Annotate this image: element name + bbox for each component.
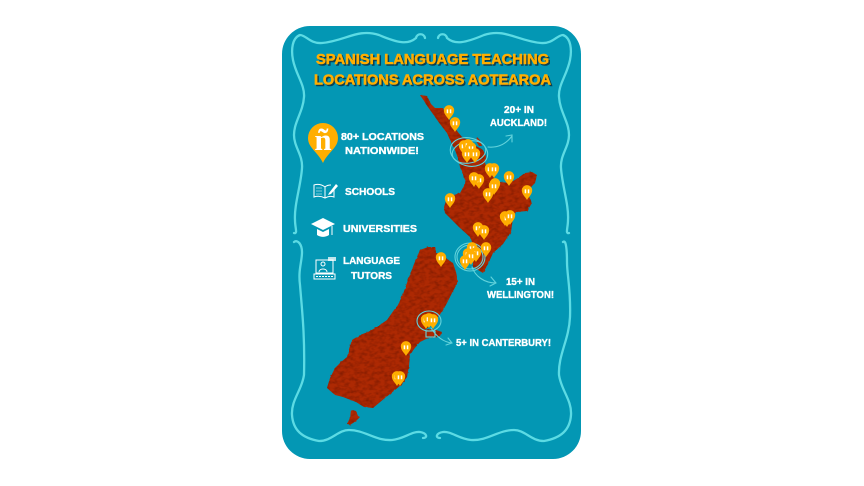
title: LOCATIONS ACROSS AOTEAROA [314, 72, 551, 88]
icon: graduation cap [311, 218, 335, 237]
callout: Wellington ring [455, 243, 485, 271]
callout: Auckland ring [447, 134, 491, 170]
text: universities: UNIVERSITIES [343, 223, 417, 235]
icon: open book and pen [314, 184, 338, 198]
text: 20+ in Auckland: AUCKLAND! [490, 117, 547, 129]
title: SPANISH LANGUAGE TEACHING [318, 52, 550, 70]
text: 15+ in Wellington: 15+ IN [506, 276, 535, 288]
arrow: to Auckland [488, 135, 512, 147]
icon: large ñ location pin: ñ [314, 122, 332, 157]
title: SPANISH LANGUAGE TEACHING [316, 51, 549, 68]
arrow: to Canterbury [431, 328, 452, 345]
text: 20+ in Auckland: 20+ IN [504, 104, 534, 116]
decorative frame: right half [437, 33, 571, 441]
map: Stewart Island [347, 410, 360, 425]
text: language tutors: TUTORS [351, 270, 392, 282]
text: 20+ in Auckland [490, 104, 547, 129]
text: 15+ in Wellington: WELLINGTON! [487, 289, 554, 301]
map: Great Barrier Island [476, 137, 482, 146]
text: 80+ locations nationwide: NATIONWIDE! [345, 145, 419, 157]
text: language tutors [343, 255, 400, 282]
text: 80+ locations nationwide [341, 131, 424, 157]
icon: tutor on laptop [314, 257, 336, 279]
text: 15+ in Wellington [487, 276, 554, 301]
text: language tutors: LANGUAGE [343, 255, 400, 267]
arrow: to Wellington [472, 267, 496, 286]
panel: teal card [282, 26, 581, 459]
icon: large ñ location pin [308, 122, 338, 163]
text: 5+ in Canterbury: 5+ IN CANTERBURY! [456, 337, 551, 349]
title: LOCATIONS ACROSS AOTEAROA [316, 73, 553, 90]
text: schools: SCHOOLS [345, 186, 395, 198]
title [314, 51, 553, 90]
map: North Island [420, 95, 537, 273]
map: South Island [327, 247, 458, 408]
location pins [392, 105, 532, 386]
decorative frame: left half [292, 33, 426, 441]
text: 80+ locations nationwide: 80+ LOCATIONS [341, 131, 424, 143]
callout: Canterbury ring [417, 311, 441, 337]
